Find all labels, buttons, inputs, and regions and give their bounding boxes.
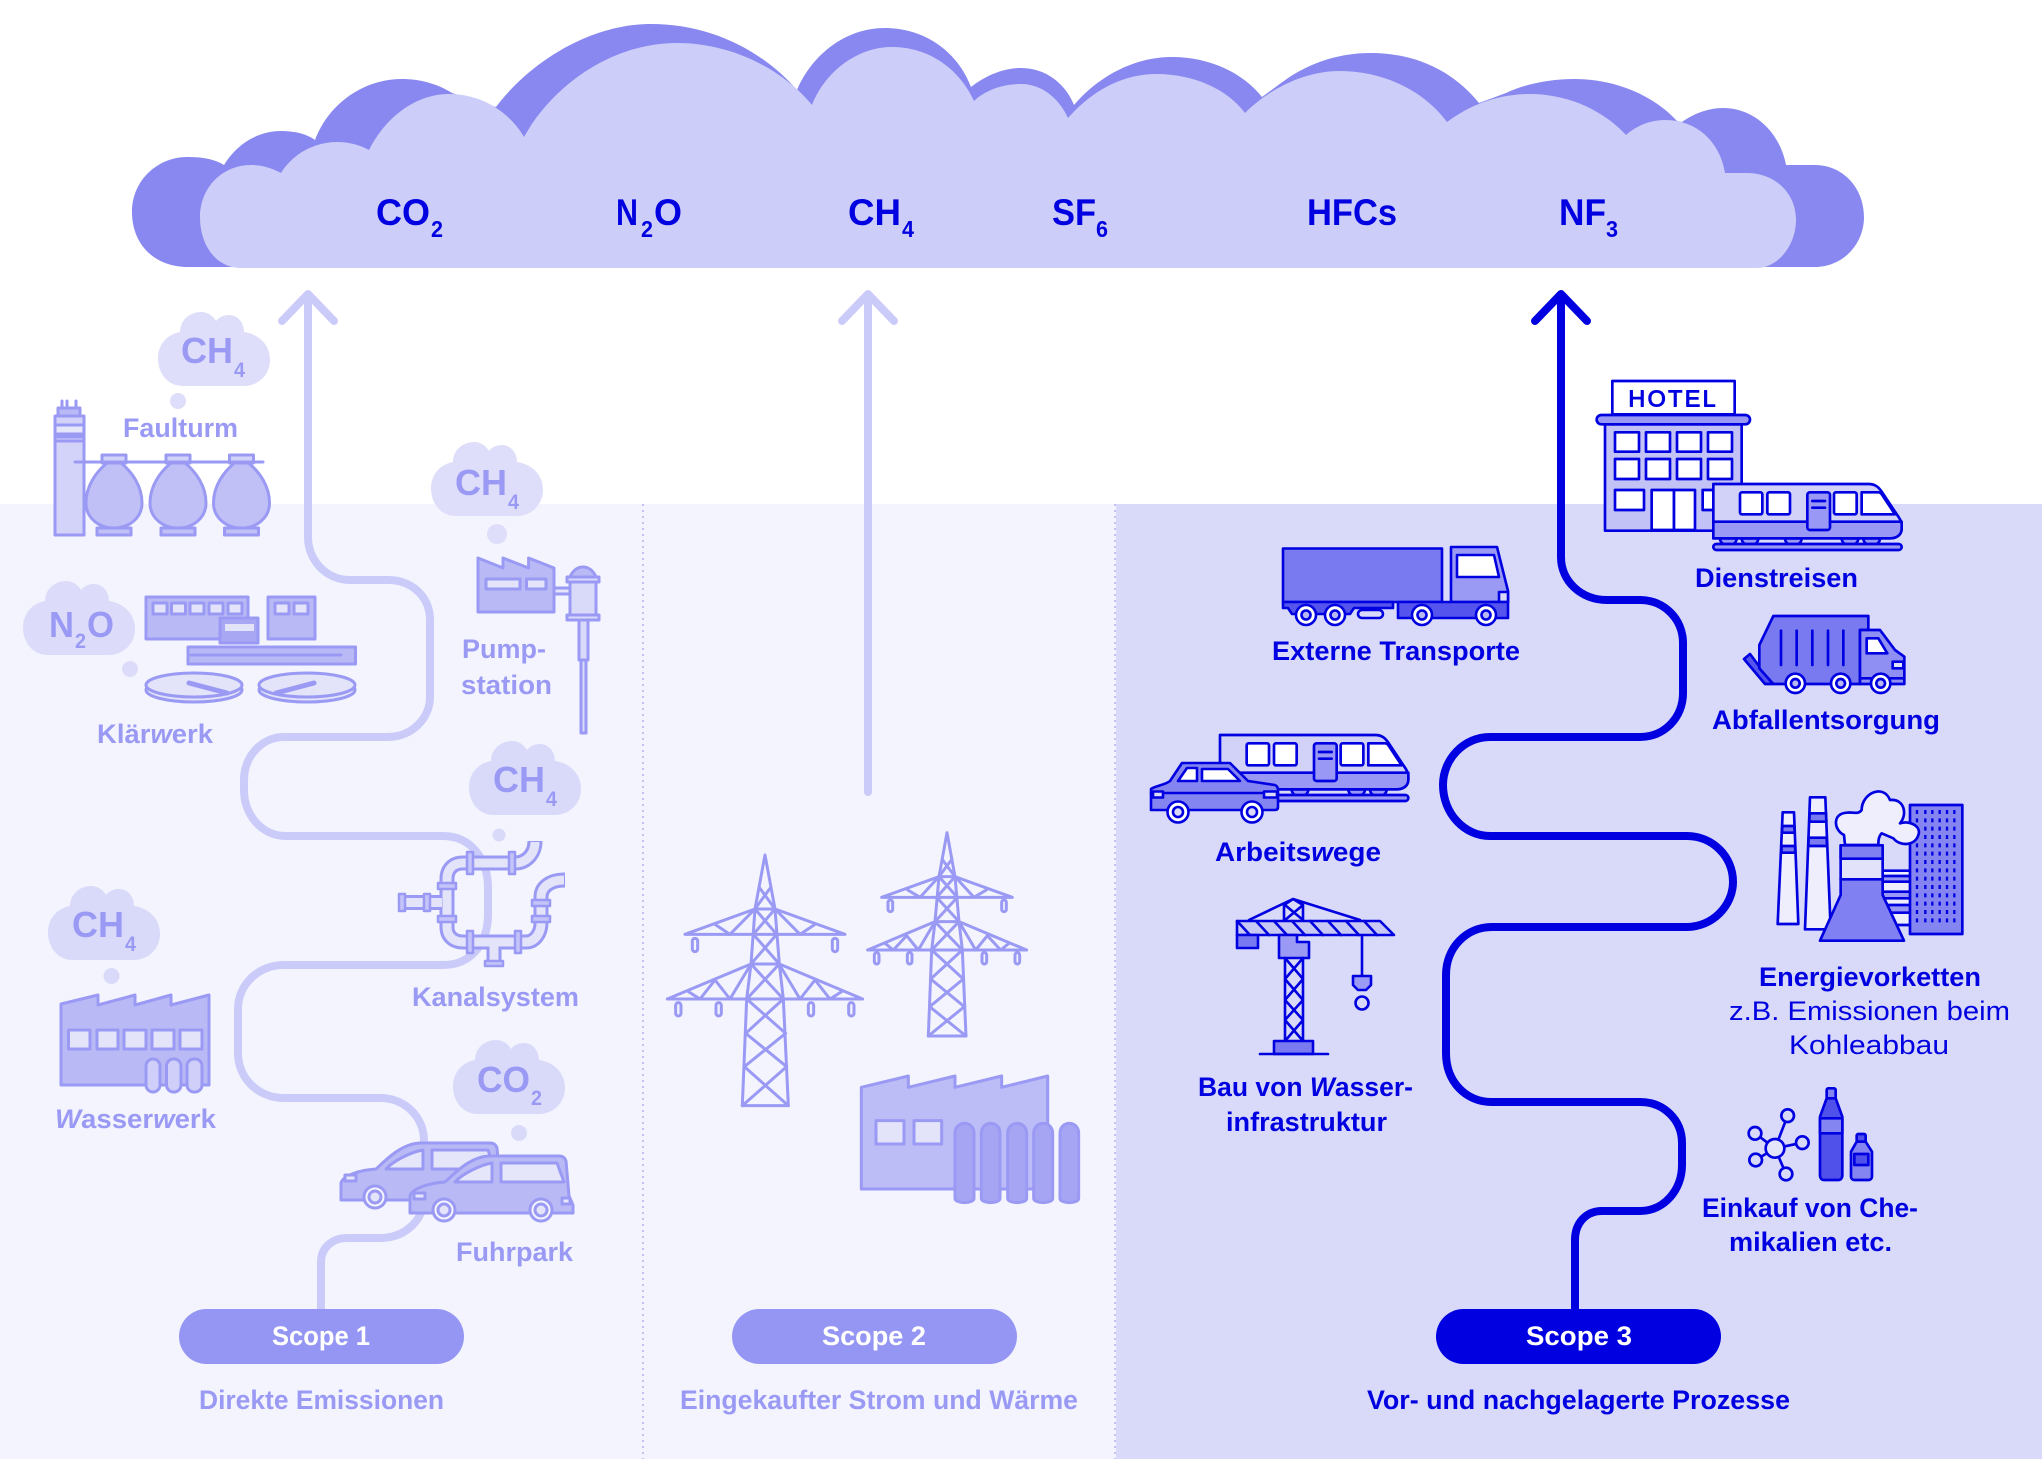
mini cloud: CO2 Fuhrpark: [453, 1040, 565, 1114]
mini cloud: N2O Klaerwerk: 2: [75, 630, 86, 653]
gas label: N2O: 2: [641, 216, 653, 242]
label: Bau von Wasser-infrastruktur: Bau von Wasser-: [1198, 1072, 1413, 1102]
bubble: [511, 1125, 527, 1141]
mini cloud: CH4 Wasserwerk: 4: [125, 933, 136, 956]
icon: factory scope 2: [861, 1076, 1079, 1203]
icon: Klaerwerk: [146, 597, 356, 702]
cloud front layer: [200, 43, 1796, 268]
gas label: CO2: 2: [431, 216, 443, 242]
gas label: SF6: SF: [1052, 192, 1096, 233]
panel: scope 3 background: [1116, 504, 2042, 1459]
mini cloud: N2O Klaerwerk: O: [87, 604, 114, 645]
icon: Wasserwerk: [61, 995, 209, 1092]
mini cloud: CH4 Pumpstation: 4: [508, 491, 519, 514]
icon: Fuhrpark cars: [341, 1143, 573, 1221]
subtitle: Eingekaufter Strom und Waerme: Eingekaufter Strom und Wärme: [680, 1385, 1078, 1415]
pill: Scope 1: Scope 1: [272, 1321, 370, 1351]
icon: molecule and bottles: [1749, 1088, 1872, 1180]
label: Fuhrpark: Fuhrpark: [456, 1237, 574, 1267]
mini cloud: CH4 Pumpstation: [431, 442, 543, 516]
mini cloud: N2O Klaerwerk: [23, 581, 135, 655]
mini cloud: CH4 Faulturm: [158, 312, 270, 386]
gas label: CH4: 4: [902, 216, 914, 242]
gas label: SF6: 6: [1096, 216, 1108, 242]
subtitle: Direkte Emissionen: Direkte Emissionen: [199, 1385, 444, 1415]
mini cloud: N2O Klaerwerk: N: [49, 604, 74, 645]
scope 3 path arrow: [1443, 294, 1733, 1309]
scope 2 arrow: [842, 294, 894, 792]
label: Einkauf von Chemikalien etc.: [1702, 1193, 1918, 1257]
label: Einkauf von Chemikalien etc.: Einkauf von Che-: [1702, 1193, 1918, 1223]
scope 1 path arrow: [238, 294, 488, 1310]
mini cloud: CH4 Kanalsystem: 4: [546, 788, 557, 811]
label: Arbeitswege: Arbeitswege: [1215, 837, 1381, 867]
mini cloud: CO2 Fuhrpark: 2: [531, 1087, 542, 1110]
bubble: [170, 393, 186, 409]
bubble: [122, 661, 138, 677]
label: Faulturm: Faulturm: [123, 413, 238, 443]
gas label: CH4: [848, 192, 914, 242]
bubble: [492, 828, 506, 842]
label: Klaerwerk: Klärwerk: [97, 719, 214, 749]
icon: train business travel: [1713, 484, 1902, 550]
label: Wasserwerk: Wasserwerk: [55, 1104, 217, 1134]
mini cloud: CH4 Kanalsystem: CH: [493, 759, 545, 800]
icon: hotel: HOTEL: [1628, 386, 1716, 412]
gas label: NF3: 3: [1606, 216, 1618, 242]
label: Bau von Wasser-infrastruktur: infrastruktur: [1226, 1107, 1387, 1137]
greenhouse gas cloud: [132, 24, 1864, 268]
icon: crane: [1237, 899, 1394, 1054]
label: Bau von Wasser-infrastruktur: [1198, 1072, 1413, 1137]
mini cloud: CH4 Pumpstation: CH: [455, 462, 507, 503]
icon: car commuting: [1151, 763, 1278, 822]
pill: Scope 2: [732, 1309, 1017, 1364]
gas label: N2O: [616, 192, 682, 242]
gas label: CH4: CH: [848, 192, 901, 233]
label: Pumpstation: [461, 634, 552, 700]
mini cloud: CO2 Fuhrpark: CO: [477, 1059, 530, 1100]
pill: Scope 3: Scope 3: [1526, 1321, 1632, 1351]
icon: garbage truck: [1744, 616, 1904, 693]
label: Energievorketten: Energievorketten: [1759, 962, 1981, 992]
subtitle: Vor- und nachgelagerte Prozesse: Vor- und nachgelagerte Prozesse: [1367, 1385, 1790, 1415]
pill: Scope 3: [1436, 1309, 1721, 1364]
icon: train commuting: [1220, 735, 1408, 801]
bubble: [104, 968, 120, 984]
icon: truck: [1283, 547, 1508, 625]
label: Abfallentsorgung: Abfallentsorgung: [1712, 705, 1940, 735]
gas label: CO2: CO: [376, 192, 430, 233]
mini cloud: CH4 Wasserwerk: [48, 886, 160, 960]
mini cloud: CH4 Faulturm: CH: [181, 330, 233, 371]
label: Energievorketten: [1729, 962, 2010, 1060]
pill: Scope 1: [179, 1309, 464, 1364]
gas label: N2O: N: [616, 192, 638, 233]
mini cloud: CH4 Wasserwerk: CH: [72, 904, 124, 945]
gas label: HFCs: HFCs: [1307, 192, 1397, 233]
icon: Faulturm: [55, 401, 270, 535]
pill: Scope 2: Scope 2: [822, 1321, 926, 1351]
label: Kanalsystem: Kanalsystem: [412, 982, 579, 1012]
mini cloud: CH4 Faulturm: 4: [234, 359, 245, 382]
label: Externe Transporte: Externe Transporte: [1272, 636, 1520, 666]
label: Pumpstation: station: [461, 670, 552, 700]
panel: scope 2 background: [643, 504, 1116, 1459]
icon: hotel: [1597, 381, 1750, 531]
icon: pylon small: [868, 833, 1027, 1036]
icon: power plant: [1778, 791, 1962, 941]
gas label: NF3: NF: [1559, 192, 1606, 233]
label: Energievorketten: Kohleabbau: [1789, 1030, 1949, 1060]
label: Energievorketten: z.B. Emissionen beim: [1729, 996, 2010, 1026]
mini cloud: CH4 Kanalsystem: [469, 741, 581, 815]
label: Dienstreisen: Dienstreisen: [1695, 563, 1858, 593]
bubble: [487, 524, 507, 544]
icon: Kanalsystem pipes: [399, 841, 565, 966]
gas label: N2O: O: [654, 192, 682, 233]
label: Pumpstation: Pump-: [462, 634, 546, 664]
cloud back layer: [132, 24, 1864, 267]
label: Einkauf von Chemikalien etc.: mikalien etc.: [1729, 1227, 1892, 1257]
icon: pylon large: [667, 855, 863, 1106]
panel: scope 1 background: [0, 504, 643, 1459]
icon: Pumpstation: [478, 558, 599, 733]
gas label: NF3: [1559, 192, 1618, 242]
gas label: SF6: [1052, 192, 1108, 242]
gas label: CO2: [376, 192, 443, 242]
